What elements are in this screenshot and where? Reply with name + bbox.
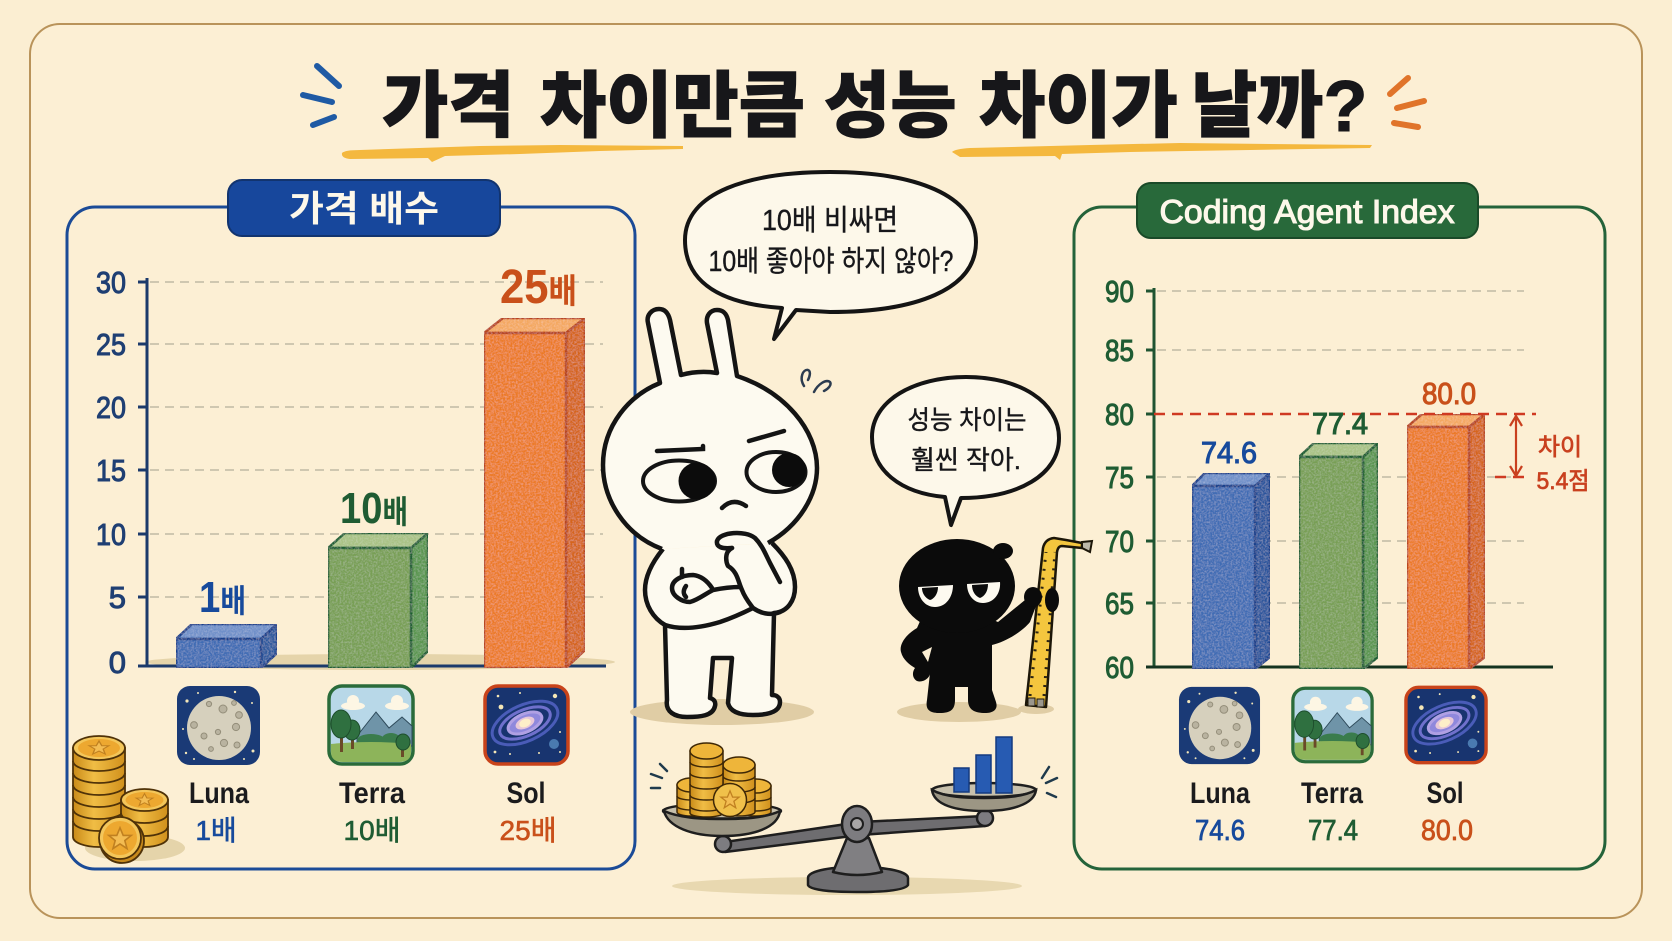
- index y axis labels: 75: [1105, 460, 1134, 495]
- label: Luna: [1190, 777, 1250, 847]
- title underline brush: right: [952, 143, 1372, 160]
- panel: price multiple: [67, 180, 635, 869]
- rabbit right eye: [746, 452, 806, 492]
- gap callout: 차이: [1538, 434, 1582, 461]
- ground shadow: [145, 654, 615, 670]
- price y axis labels: 25: [96, 327, 126, 362]
- reference line at 74.6: [1495, 476, 1524, 478]
- panel outline: [1074, 207, 1605, 869]
- speech bubble: smaller gap: 성능 차이는: [908, 405, 1026, 435]
- label: Terra: [1301, 777, 1363, 847]
- character: thinking white rabbit: [603, 309, 831, 725]
- label: Luna: 1배: [195, 815, 237, 846]
- title: 날까?: [1191, 67, 1367, 147]
- icon: Sol galaxy: [485, 686, 568, 764]
- speech bubble: smaller gap: [872, 377, 1059, 525]
- price y axis labels: 30: [96, 265, 126, 300]
- bar value labels: 74.6: [1201, 435, 1257, 470]
- panel heading: 가격 배수: 가격 배수: [289, 188, 439, 229]
- price y axis labels: 5: [109, 580, 126, 615]
- label: Terra: 77.4: [1308, 815, 1358, 847]
- arm gap highlight: [922, 647, 932, 662]
- bar: Luna price: [176, 624, 277, 668]
- label: Sol: Sol: [1426, 777, 1464, 810]
- index y axis labels: 65: [1105, 586, 1134, 621]
- scale ground shadow: [672, 877, 1022, 895]
- icon: Luna moon: [1179, 687, 1260, 764]
- price y axis labels: 10: [96, 517, 126, 552]
- creature eyes: [918, 582, 1000, 607]
- label: Luna: Luna: [189, 777, 249, 810]
- bar: Sol index: [1407, 414, 1485, 669]
- rabbit belly line: [665, 608, 753, 628]
- label: Sol: Sol: [506, 777, 546, 810]
- rabbit ground shadow: [630, 699, 814, 725]
- price x axis baseline: [138, 664, 606, 668]
- gap callout: [1536, 434, 1590, 495]
- measuring tape: [1026, 538, 1092, 707]
- title sparks: orange: [1390, 78, 1424, 127]
- creature hands: [1024, 587, 1059, 612]
- label: Luna: [189, 777, 249, 846]
- motion marks: [651, 764, 1057, 797]
- scale hinges: [715, 810, 993, 852]
- sweat marks: [802, 370, 831, 392]
- gap arrow: [1510, 416, 1522, 476]
- label: Sol: [500, 777, 556, 846]
- coins on left pan: [677, 743, 771, 817]
- left pan bowl: [664, 811, 780, 836]
- bar label: 25배: 25배: [500, 261, 577, 314]
- rabbit head and ears: [603, 309, 817, 549]
- title: 차이만큼: [540, 67, 825, 147]
- creature body: [901, 600, 1036, 713]
- label: Sol: 25배: [500, 815, 556, 846]
- icon: Luna moon: [177, 686, 260, 765]
- label: Sol: 80.0: [1421, 815, 1473, 847]
- character: black creature with measuring tape: [897, 538, 1092, 722]
- label: Terra: [339, 777, 405, 846]
- index x axis baseline: [1146, 666, 1553, 668]
- speech bubble: price question: 10배 좋아야 하지 않아?: [708, 245, 954, 278]
- bar: Sol price: [484, 318, 585, 668]
- icon: coin stacks: [73, 736, 185, 863]
- icon: Sol galaxy: [1406, 687, 1486, 763]
- bar: Luna index: [1192, 473, 1270, 669]
- index y axis labels: 70: [1105, 524, 1134, 559]
- gap callout: 5.4점: [1536, 468, 1590, 495]
- label: Luna: 74.6: [1195, 815, 1245, 847]
- scale beam: [725, 816, 985, 852]
- title: 성능: [824, 67, 976, 147]
- icon: Terra landscape: [1293, 688, 1372, 762]
- rabbit left eye: [643, 460, 716, 502]
- rabbit brows and mouth: [657, 431, 784, 508]
- bar label: 1배: 1배: [199, 573, 246, 622]
- price y axis: [138, 278, 147, 666]
- bar: Terra price: [328, 533, 428, 668]
- reference line at 80: [1154, 413, 1536, 415]
- index chart grid: [1157, 291, 1524, 603]
- panel heading: Coding Agent Index: Coding Agent Index: [1160, 193, 1455, 230]
- icon: Terra landscape: [329, 686, 413, 764]
- panel heading: 가격 배수: [228, 180, 500, 236]
- label: Sol: [1421, 777, 1473, 847]
- index y axis labels: 60: [1105, 650, 1134, 685]
- creature head: [899, 539, 1015, 633]
- index y axis labels: 90: [1105, 274, 1134, 309]
- creature ear: [993, 543, 1013, 559]
- label: Terra: Terra: [339, 777, 405, 810]
- scale base and post: [808, 838, 908, 892]
- bar label: 10배: 10배: [340, 484, 408, 533]
- scale pivot: [842, 806, 872, 842]
- index y axis: [1146, 288, 1154, 667]
- bar value labels: 80.0: [1422, 376, 1476, 411]
- rabbit hand on chin and arm: [717, 533, 780, 614]
- panel: coding agent index: [1074, 183, 1605, 869]
- bars on right pan: [954, 737, 1012, 793]
- right pan bowl: [932, 790, 1036, 811]
- left pan rim: [663, 804, 781, 818]
- label: Terra: 10배: [344, 815, 400, 846]
- panel heading: Coding Agent Index: [1137, 183, 1478, 238]
- price y axis labels: 0: [109, 645, 126, 680]
- creature ground shadow: [897, 702, 1054, 722]
- rabbit folded arm: [672, 569, 740, 602]
- index y axis labels: 85: [1105, 333, 1134, 368]
- bar value labels: 77.4: [1312, 406, 1368, 441]
- speech bubble: smaller gap: 훨씬 작아.: [911, 445, 1021, 475]
- title: 차이가: [979, 67, 1198, 147]
- bar value labels: [1201, 376, 1476, 470]
- title sparks: blue: [303, 66, 339, 125]
- speech bubble: price question: 10배 비싸면: [762, 204, 898, 237]
- index y axis labels: [1105, 274, 1134, 685]
- title: 가격: [382, 67, 534, 147]
- icon: balance scale: [651, 737, 1057, 895]
- index y axis labels: 80: [1105, 397, 1134, 432]
- right pan rim: [932, 783, 1036, 797]
- panel outline: [67, 207, 635, 869]
- price y axis labels: 15: [96, 453, 126, 488]
- title underline brush: left: [342, 145, 683, 162]
- price y axis labels: [96, 265, 126, 680]
- speech bubble: price question: [685, 172, 976, 339]
- price y axis labels: 20: [96, 390, 126, 425]
- price chart grid: [150, 282, 603, 597]
- bar: Terra index: [1299, 443, 1378, 669]
- label: Terra: Terra: [1301, 777, 1363, 810]
- rabbit body: [645, 543, 795, 717]
- label: Luna: Luna: [1190, 777, 1250, 810]
